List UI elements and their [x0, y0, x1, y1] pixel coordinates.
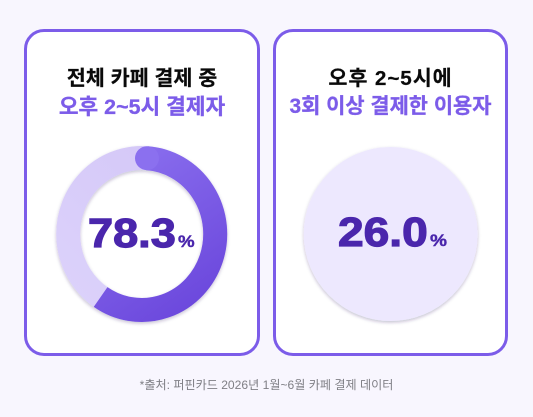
heading line 1: 오후 2~5시에	[328, 67, 453, 90]
circle chart: 26.0%	[304, 147, 478, 321]
panel: cafe payment share	[24, 29, 260, 356]
source note: *출처: 퍼핀카드 2026년 1월~6월 카페 결제 데이터	[140, 378, 393, 392]
value: 26.0%: 26.0%	[338, 209, 447, 255]
heading line 1: 전체 카페 결제 중	[67, 67, 217, 90]
arc rounded start	[135, 146, 159, 170]
panel: repeat payers	[273, 29, 508, 356]
donut chart: 78.3%	[68, 146, 215, 310]
heading: cafe payment share	[59, 67, 225, 119]
donut value arc	[101, 158, 215, 310]
heading: repeat payers	[289, 67, 492, 118]
heading line 2: 3회 이상 결제한 이용자	[289, 95, 492, 118]
heading line 2: 오후 2~5시 결제자	[59, 95, 225, 119]
donut track	[68, 158, 215, 310]
value: 78.3%: 78.3%	[88, 210, 195, 256]
